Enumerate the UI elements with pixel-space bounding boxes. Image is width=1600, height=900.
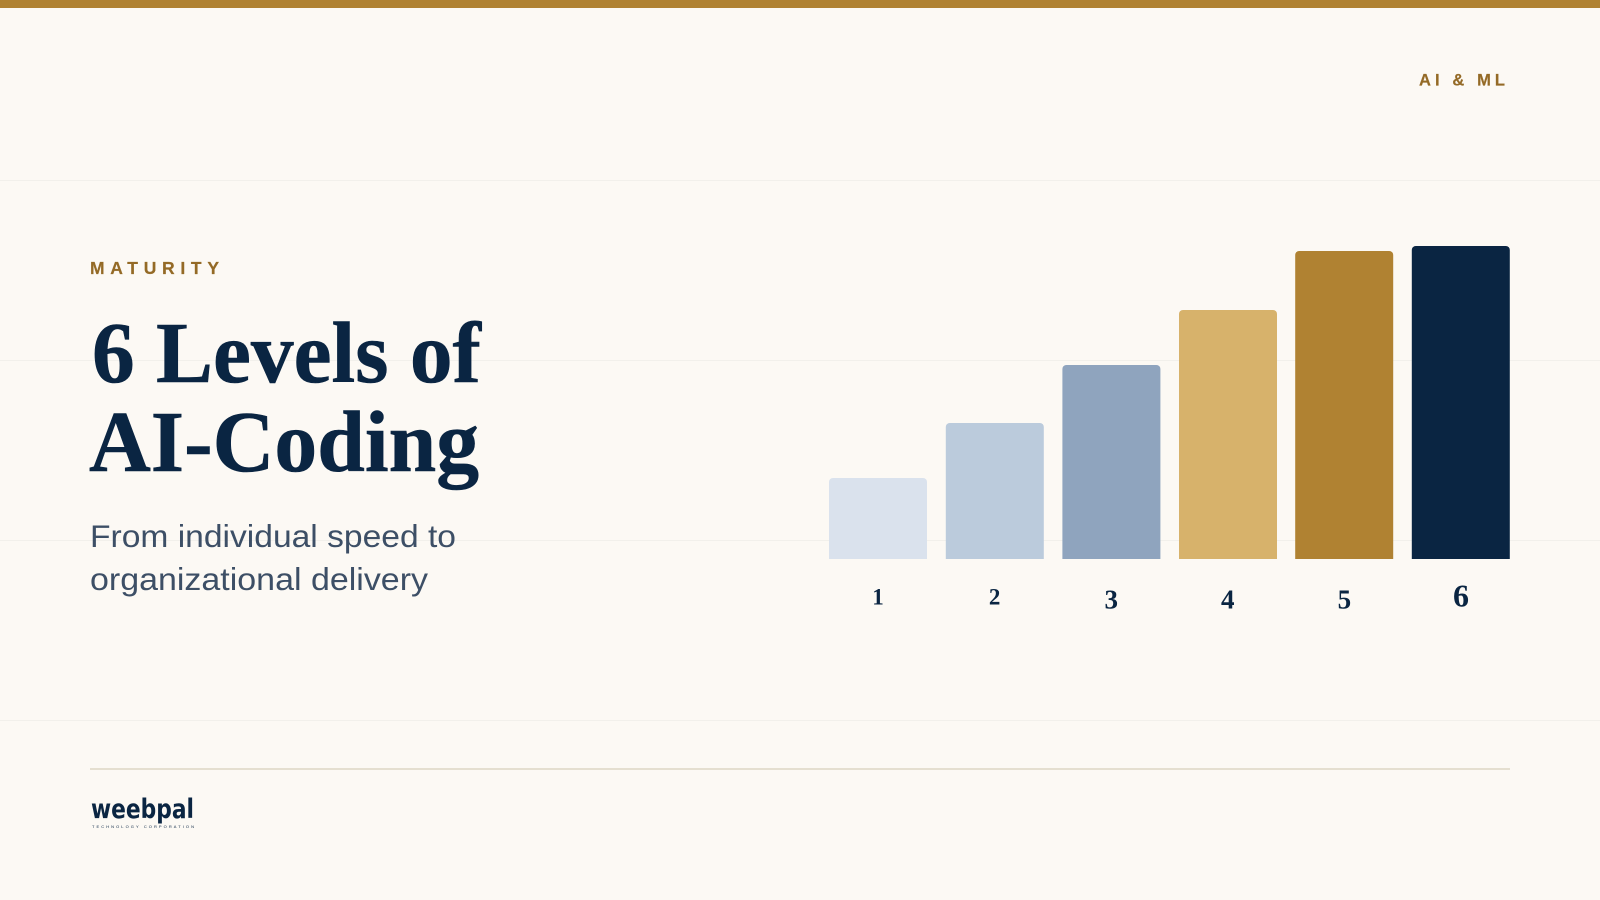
bar: level 4 xyxy=(1179,310,1277,559)
title: AI-Coding xyxy=(89,393,479,490)
subtitle: organizational delivery xyxy=(90,561,428,597)
label: level 4: 4 xyxy=(1221,584,1235,614)
logo: weebpal: TECHNOLOGY CORPORATION xyxy=(92,824,194,829)
label: level 6: 6 xyxy=(1453,578,1469,614)
title: 6 Levels of xyxy=(92,304,482,401)
subtitle: From individual speed to xyxy=(90,518,456,554)
bar: level 3 xyxy=(1062,365,1160,559)
bar chart: six maturity levels xyxy=(829,246,1510,614)
logo: weebpal: weebpal xyxy=(91,794,194,825)
subtitle xyxy=(90,518,456,597)
title xyxy=(89,304,482,490)
label: level 2: 2 xyxy=(989,584,1000,610)
bar: level 6 xyxy=(1412,246,1510,559)
eyebrow label: MATURITY xyxy=(90,258,219,278)
label: level 5: 5 xyxy=(1338,584,1351,614)
bar: level 2 xyxy=(946,423,1044,559)
bar: level 5 xyxy=(1295,251,1393,559)
label: level 3: 3 xyxy=(1104,584,1118,614)
bar: level 1 xyxy=(829,478,927,559)
label: level 1: 1 xyxy=(872,584,884,610)
category tag: AI & ML xyxy=(1419,72,1505,90)
top accent bar xyxy=(0,0,1600,8)
